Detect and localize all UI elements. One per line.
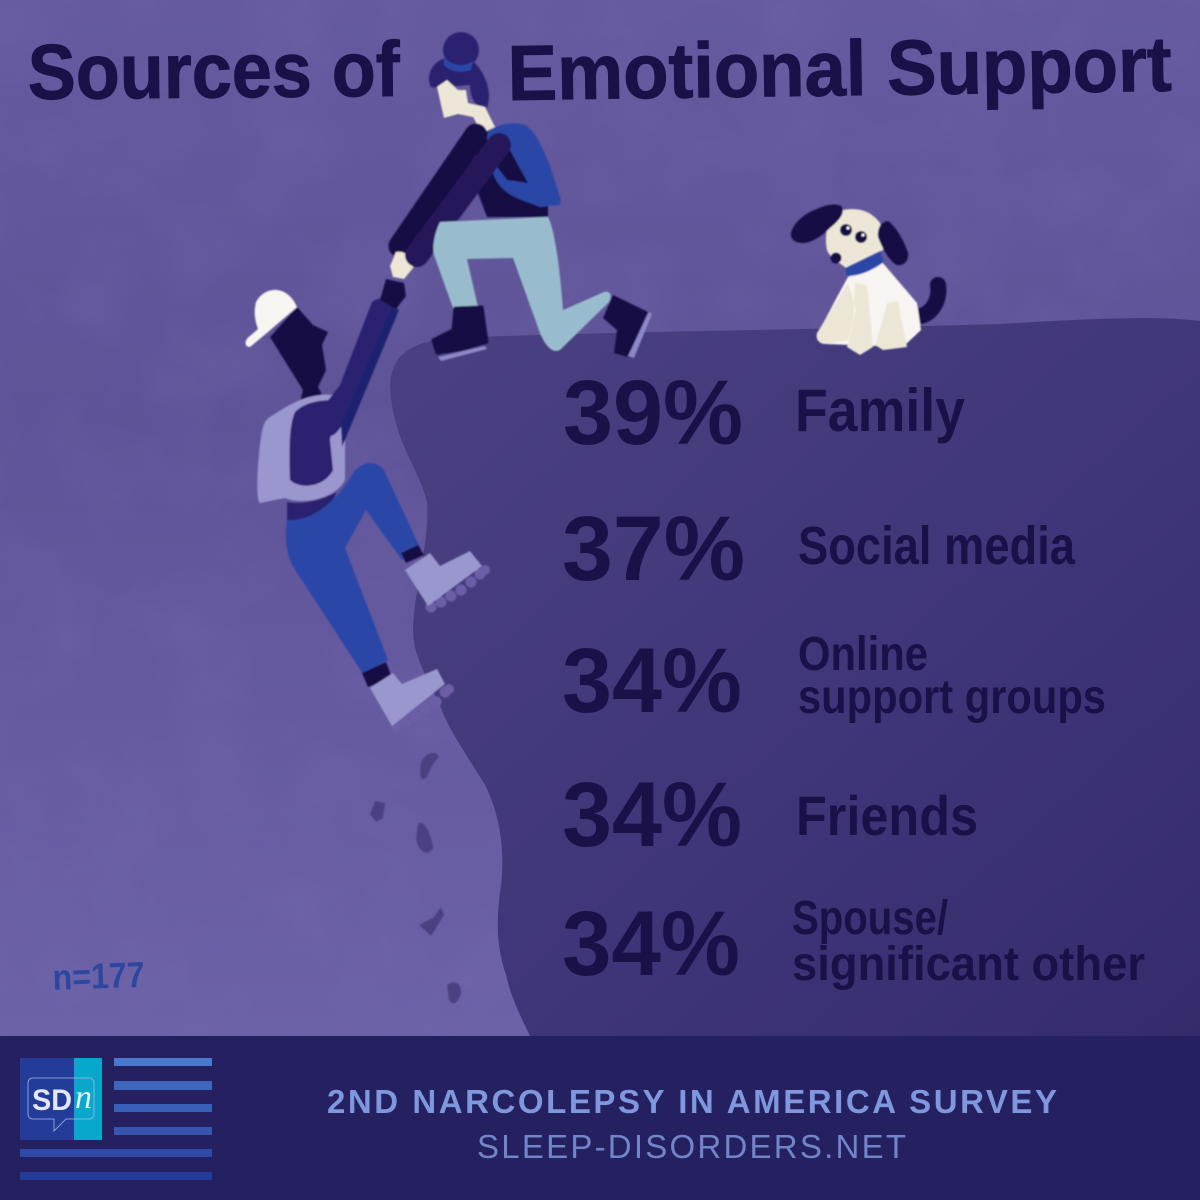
head <box>826 209 883 268</box>
rear boot <box>603 295 648 357</box>
stat: friends <box>562 764 978 866</box>
boot treads <box>390 565 490 732</box>
waist <box>287 492 337 525</box>
legs <box>817 283 907 355</box>
body <box>817 262 921 347</box>
title: Emotional Support <box>507 20 1172 117</box>
cap <box>246 290 297 347</box>
hair band <box>444 57 473 72</box>
stat: online support groups: support groups <box>798 671 1106 724</box>
stat: social media: Social media <box>798 516 1076 576</box>
nose <box>830 252 842 264</box>
stat: online support groups <box>562 628 1106 732</box>
illustration: woman reaching down <box>390 32 652 361</box>
eyes <box>840 224 867 243</box>
hair and bun <box>429 32 489 108</box>
stat: social media <box>562 498 1076 600</box>
stat: spouse: Spouse/ <box>792 892 948 945</box>
stat: spouse: 34% <box>562 893 740 995</box>
survey title: 2ND NARCOLEPSY IN AMERICA SURVEY <box>327 1083 1057 1120</box>
torso strap area <box>290 400 335 486</box>
stat: social media: 37% <box>562 498 745 600</box>
climbing arm <box>305 299 392 437</box>
glove <box>380 279 406 309</box>
ear left <box>791 205 843 243</box>
stat: online support groups: 34% <box>562 630 742 732</box>
head <box>270 307 328 402</box>
lower boot <box>370 669 445 726</box>
collar <box>845 251 884 276</box>
illustration: climber <box>246 279 490 732</box>
upper boot <box>405 551 482 606</box>
falling rocks <box>370 753 461 1003</box>
trousers <box>433 217 611 351</box>
eye highlights <box>846 226 864 236</box>
logo flag: n <box>75 1079 92 1116</box>
front boot sole <box>438 346 487 361</box>
jeans <box>286 463 422 674</box>
back arm <box>400 135 476 246</box>
website: SLEEP-DISORDERS.NET <box>477 1128 906 1165</box>
backpack <box>257 395 345 503</box>
dog <box>791 205 938 355</box>
front arm <box>417 145 499 255</box>
logo flag <box>20 1058 212 1180</box>
title <box>27 20 1172 117</box>
hand <box>390 252 413 279</box>
stat: spouse: significant other <box>792 938 1145 991</box>
cliff <box>390 318 1200 1040</box>
title: Sources of <box>27 25 401 116</box>
torso <box>475 127 548 217</box>
front boot <box>433 307 487 353</box>
dark arm edge <box>341 306 399 447</box>
stat: family: 39% <box>563 362 743 464</box>
footer band <box>0 1036 1200 1200</box>
logo flag: SD <box>32 1084 72 1117</box>
ear right <box>878 221 908 265</box>
stat: family: Family <box>795 377 966 444</box>
stat: friends: 34% <box>562 764 742 866</box>
stat: spouse <box>562 892 1145 995</box>
socks <box>362 545 424 687</box>
face and neck <box>437 80 495 133</box>
backpack <box>483 123 561 207</box>
stat: online support groups: Online <box>798 628 928 681</box>
stat: friends: Friends <box>796 784 978 847</box>
sample size: n=177 <box>52 954 145 998</box>
tail <box>921 285 938 316</box>
rear boot sole <box>628 312 652 358</box>
stat: family <box>563 362 966 464</box>
